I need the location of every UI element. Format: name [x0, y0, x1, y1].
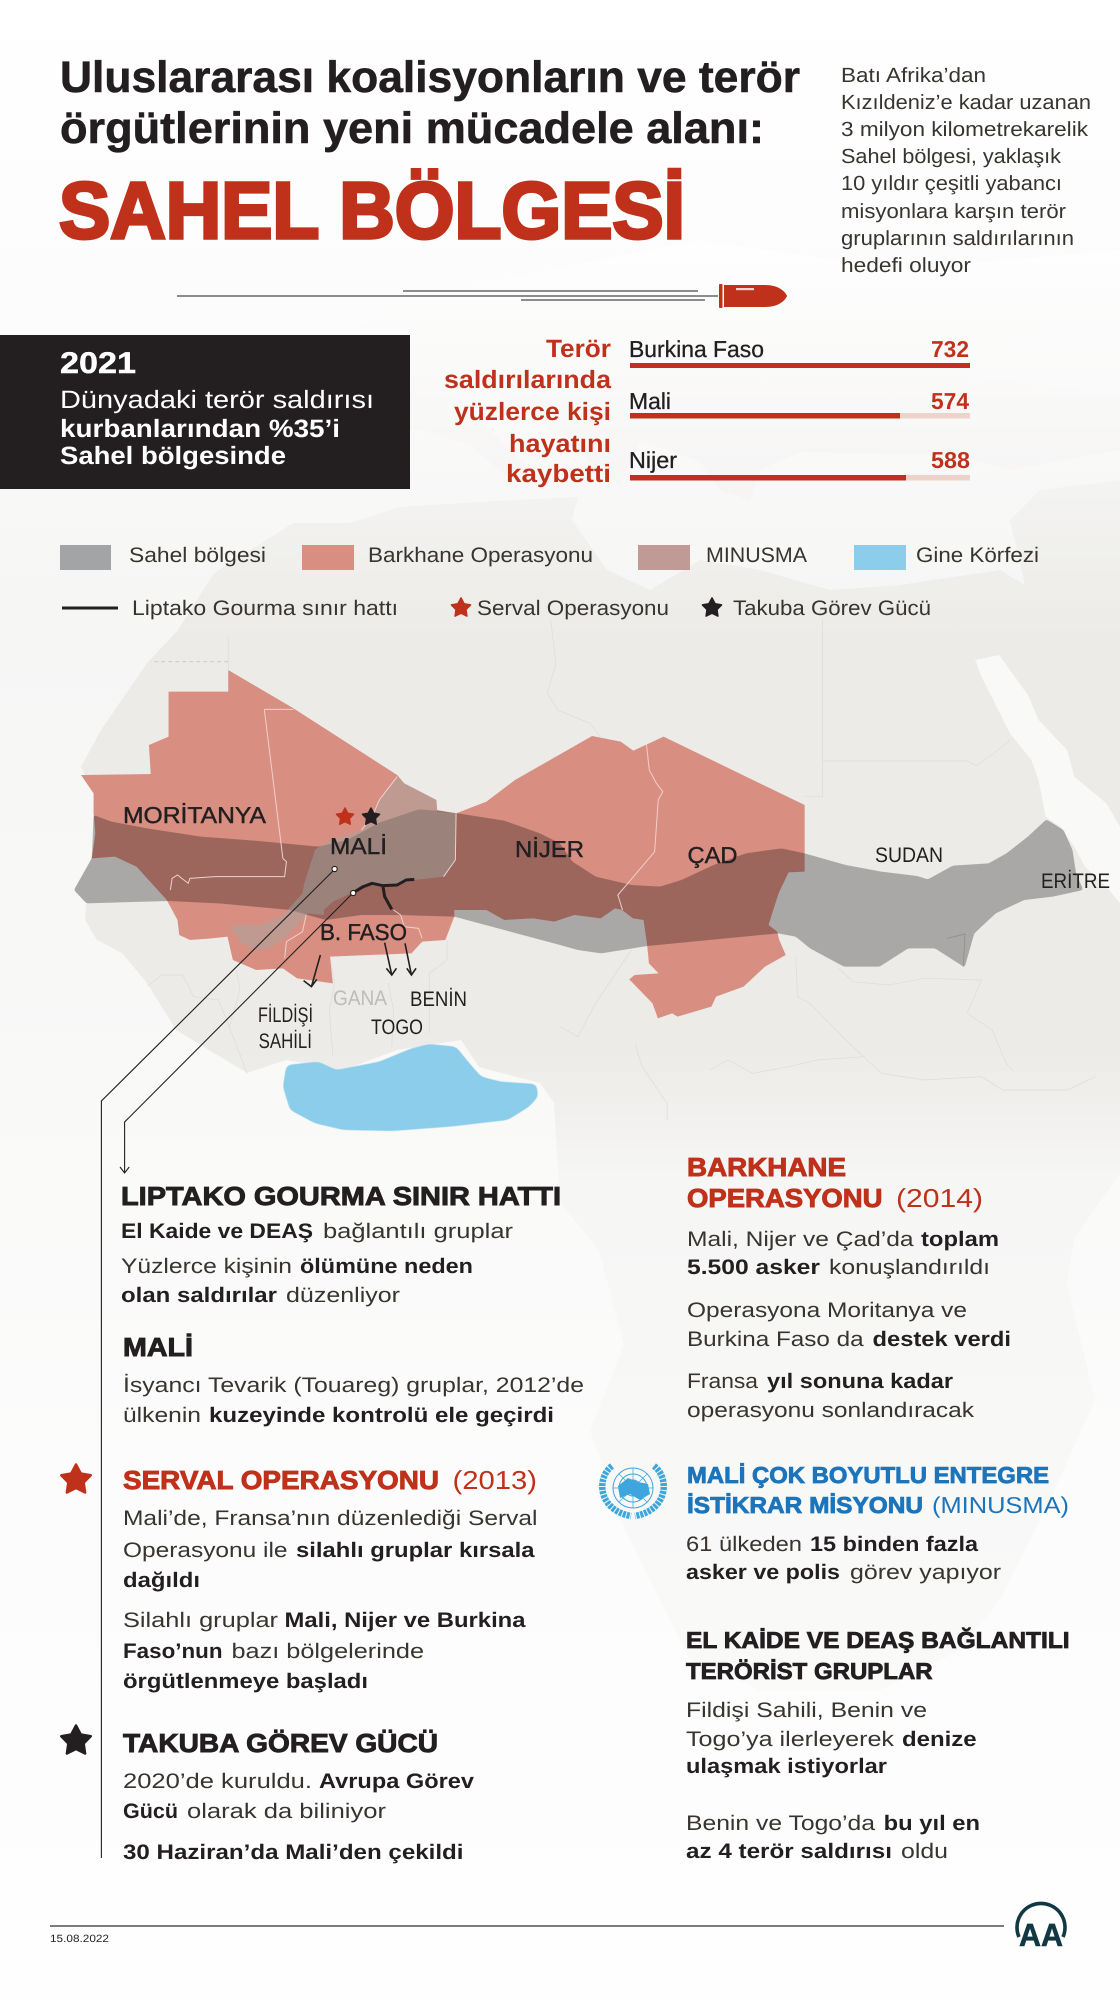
title: Uluslararası koalisyonların ve terör — [60, 53, 800, 102]
heading: deaths text: Terör — [546, 335, 611, 363]
intro paragraph: Kızıldeniz’e kadar uzanan — [841, 91, 1091, 114]
text block: Liptako Gourma: bağlantılı gruplar — [323, 1220, 513, 1243]
text block: Takuba Görev Gücü: olarak da biliniyor — [187, 1800, 386, 1823]
text block: Liptako Gourma: düzenliyor — [286, 1284, 400, 1307]
map labels: NİJER — [515, 836, 584, 862]
map labels: ÇAD — [688, 842, 738, 868]
text block: Mali: kuzeyinde kontrolü ele geçirdi — [209, 1404, 554, 1427]
text block: Serval Operasyonu: Mali, Nijer ve Burkina — [284, 1609, 526, 1632]
text block: Takuba Görev Gücü: Gücü — [123, 1800, 178, 1823]
heading: deaths text: yüzlerce kişi — [454, 398, 611, 426]
text block: MINUSMA: 15 binden fazla — [810, 1533, 978, 1556]
intro paragraph: misyonlara karşın terör — [841, 200, 1066, 223]
text block: Barkhane Operasyonu: Mali, Nijer ve Çad’da — [687, 1228, 914, 1251]
MINUSMA area — [231, 777, 456, 950]
heading: deaths text: saldırılarında — [444, 366, 612, 394]
text block: Serval Operasyonu: örgütlenmeye başladı — [123, 1670, 368, 1693]
text block: Liptako Gourma: Yüzlerce kişinin — [121, 1255, 292, 1278]
text block: Takuba Görev Gücü: 30 Haziran’da Mali’den çekildi — [123, 1841, 464, 1864]
text block: Serval Operasyonu: Operasyonu ile — [123, 1539, 288, 1562]
text block: MINUSMA: (MINUSMA) — [932, 1492, 1069, 1518]
Gulf of Guinea — [283, 1044, 538, 1131]
heading: deaths text: hayatını — [509, 430, 611, 458]
text block: Takuba Görev Gücü — [123, 1728, 474, 1864]
text block: Takuba Görev Gücü: 2020’de kuruldu. — [123, 1770, 312, 1793]
text block: Serval Operasyonu: Mali’de, Fransa’nın düzenlediği Serval — [123, 1507, 538, 1530]
icon: Serval star on map — [336, 808, 354, 824]
intro paragraph: hedefi oluyor — [841, 254, 971, 277]
text block: terrorist groups: ulaşmak istiyorlar — [686, 1755, 887, 1778]
panel: 2021 black box: Sahel bölgesinde — [60, 442, 286, 470]
text block: Serval Operasyonu: (2013) — [452, 1465, 537, 1495]
text block: Mali: ülkenin — [123, 1404, 201, 1427]
bar: Mali: 574 — [931, 388, 969, 414]
icon: Takuba star — [61, 1726, 91, 1754]
text block: Serval Operasyonu: Silahlı gruplar — [123, 1609, 278, 1632]
bar: Mali — [629, 388, 970, 418]
text block: Barkhane Operasyonu: Burkina Faso da — [687, 1328, 864, 1351]
panel: 2021 black box: Dünyadaki terör saldırısı — [60, 386, 374, 414]
text block: Barkhane Operasyonu: 5.500 asker — [687, 1256, 820, 1279]
text block: MINUSMA: asker ve polis — [686, 1561, 840, 1584]
map labels: GANA — [333, 987, 387, 1010]
text block: Serval Operasyonu: Faso’nun — [123, 1640, 222, 1663]
connector lines from map to text — [101, 866, 356, 1858]
text block: Mali: MALİ — [123, 1332, 193, 1362]
intro paragraph: gruplarının saldırılarının — [841, 227, 1074, 250]
icon: AA logo: AA — [1019, 1917, 1063, 1953]
text block: Mali: İsyancı Tevarik (Touareg) gruplar, 2012’de — [123, 1373, 584, 1397]
text block: Barkhane Operasyonu: Fransa — [687, 1370, 758, 1393]
legend: Barkhane Operasyonu — [368, 544, 593, 567]
map labels: MALİ — [330, 833, 387, 859]
text block: Barkhane Operasyonu: yıl sonuna kadar — [767, 1370, 953, 1393]
icon: UN emblem — [602, 1466, 664, 1516]
intro paragraph: 10 yıldır çeşitli yabancı — [841, 172, 1062, 195]
legend: Gine Körfezi — [916, 544, 1039, 567]
text block: terrorist groups — [686, 1627, 1070, 1863]
text block: terrorist groups: EL KAİDE VE DEAŞ BAĞLANTILI — [686, 1627, 1070, 1653]
text block: Liptako Gourma: LIPTAKO GOURMA SINIR HATTI — [121, 1181, 561, 1211]
bar: Mali: Mali — [629, 388, 671, 414]
bar: Burkina Faso — [629, 336, 970, 368]
text block: MINUSMA: MALİ ÇOK BOYUTLU ENTEGRE — [687, 1462, 1049, 1488]
text block: Barkhane Operasyonu: operasyonu sonlandıracak — [687, 1399, 975, 1422]
footer line and date: 15.08.2022 — [50, 1933, 109, 1945]
title: örgütlerinin yeni mücadele alanı: — [60, 104, 764, 153]
text block: Barkhane Operasyonu: Operasyona Moritanya ve — [687, 1299, 967, 1322]
legend: Sahel bölgesi — [129, 544, 266, 567]
icon: AA logo — [1017, 1903, 1065, 1953]
text block: Liptako Gourma — [121, 1181, 561, 1307]
legend: MINUSMA — [706, 544, 807, 567]
text block: Barkhane Operasyonu: BARKHANE — [687, 1152, 846, 1182]
text block: terrorist groups: denize — [902, 1728, 977, 1751]
intro paragraph: Batı Afrika’dan — [841, 64, 986, 87]
text block: Liptako Gourma: olan saldırılar — [121, 1284, 277, 1307]
text block: Barkhane Operasyonu — [687, 1152, 1011, 1422]
panel: 2021 black box: 2021 — [60, 347, 136, 380]
bar: Nijer — [629, 447, 970, 480]
text block: Barkhane Operasyonu: destek verdi — [872, 1328, 1011, 1351]
Liptako Gourma line — [353, 879, 414, 909]
map labels: SUDAN — [875, 844, 943, 867]
text block: terrorist groups: az 4 terör saldırısı — [686, 1840, 892, 1863]
map labels: FİLDİŞİ — [258, 1003, 313, 1027]
text block: MINUSMA: görev yapıyor — [850, 1561, 1001, 1584]
text block: Serval Operasyonu: bazı bölgelerinde — [232, 1640, 424, 1663]
text block: Mali — [123, 1332, 584, 1427]
text block: Liptako Gourma: ölümüne neden — [300, 1255, 473, 1278]
text block: terrorist groups: oldu — [901, 1840, 948, 1863]
map labels — [123, 802, 1110, 1053]
map labels: B. FASO — [320, 919, 407, 945]
panel: 2021 black box: kurbanlarından %35’i — [60, 415, 340, 443]
map labels: BENİN — [410, 987, 467, 1011]
legend: Liptako Gourma sınır hattı — [132, 597, 398, 620]
heading: deaths text: kaybetti — [506, 460, 611, 488]
map labels: SAHİLİ — [259, 1029, 312, 1053]
intro paragraph: Sahel bölgesi, yaklaşık — [841, 145, 1062, 168]
text block: Barkhane Operasyonu: konuşlandırıldı — [829, 1256, 990, 1279]
text block: MINUSMA — [686, 1462, 1069, 1584]
text block: Serval Operasyonu: SERVAL OPERASYONU — [123, 1465, 439, 1495]
text block: Barkhane Operasyonu: OPERASYONU — [687, 1183, 882, 1213]
text block: Serval Operasyonu: dağıldı — [123, 1569, 200, 1592]
text block: Serval Operasyonu: silahlı gruplar kırsala — [296, 1539, 535, 1562]
panel: 2021 black box — [0, 335, 410, 489]
text block: terrorist groups: TERÖRİST GRUPLAR — [686, 1658, 933, 1684]
bar: Burkina Faso: Burkina Faso — [629, 336, 764, 362]
Barkhane area — [81, 670, 805, 1018]
text block: terrorist groups: Benin ve Togo’da — [686, 1812, 875, 1835]
text block: Takuba Görev Gücü: Avrupa Görev — [319, 1770, 474, 1793]
legend: Serval Operasyonu — [477, 597, 669, 620]
text block: terrorist groups: Togo’ya ilerleyerek — [686, 1728, 895, 1751]
intro paragraph — [841, 64, 1091, 277]
bar chart: deaths by country — [629, 336, 970, 480]
text block: MINUSMA: İSTİKRAR MİSYONU — [687, 1492, 923, 1518]
map labels: ERİTRE — [1041, 869, 1110, 893]
legend — [60, 544, 1039, 620]
arrows toward the coastal states — [304, 943, 416, 987]
title — [59, 53, 800, 255]
text block: terrorist groups: Fildişi Sahili, Benin ve — [686, 1699, 927, 1722]
map labels: MORİTANYA — [123, 802, 267, 828]
text block: Liptako Gourma: El Kaide ve DEAŞ — [121, 1220, 313, 1243]
title: SAHEL BÖLGESİ — [59, 166, 685, 255]
legend: Takuba Görev Gücü — [733, 597, 931, 620]
text block: terrorist groups: bu yıl en — [884, 1812, 980, 1835]
heading: deaths text — [444, 335, 612, 488]
background map: Africa and Europe — [74, 240, 1120, 1690]
Sahel band — [74, 809, 1083, 967]
icon: Takuba star on map — [362, 808, 380, 824]
bar: Burkina Faso: 732 — [931, 336, 969, 362]
text block: Takuba Görev Gücü: TAKUBA GÖREV GÜCÜ — [123, 1728, 438, 1758]
bar: Nijer: Nijer — [629, 447, 677, 473]
text block: MINUSMA: 61 ülkeden — [686, 1533, 802, 1556]
map labels: TOGO — [371, 1016, 423, 1039]
intro paragraph: 3 milyon kilometrekarelik — [841, 118, 1089, 141]
text block: Barkhane Operasyonu: toplam — [921, 1228, 999, 1251]
map: Sahel region — [74, 620, 1110, 1858]
icon: bullet with speed lines — [177, 284, 787, 308]
text block: Barkhane Operasyonu: (2014) — [896, 1183, 983, 1213]
icon: Serval star — [61, 1464, 91, 1493]
bar: Nijer: 588 — [931, 447, 970, 473]
text block: Serval Operasyonu — [123, 1465, 538, 1693]
